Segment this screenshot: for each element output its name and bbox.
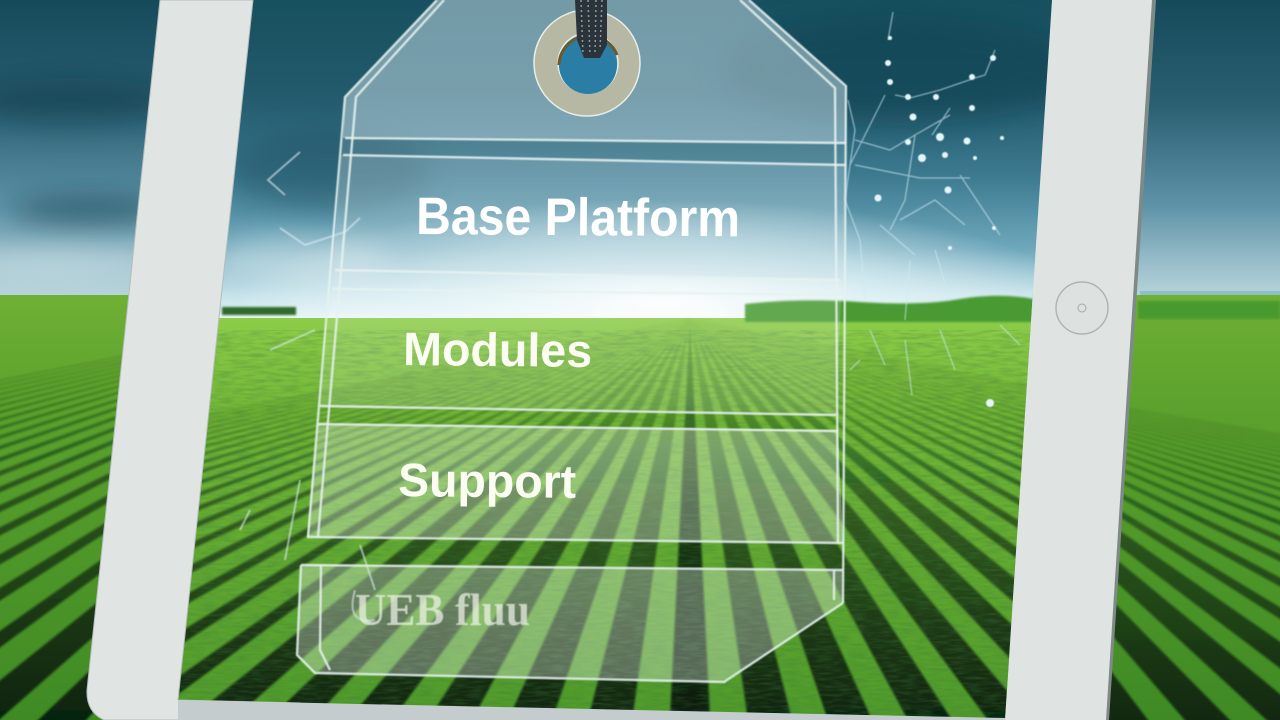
digital network sparkle right xyxy=(845,12,1020,407)
tag support band xyxy=(307,424,843,543)
tag gap band xyxy=(341,138,846,165)
label: Base Platform: Base Platform xyxy=(416,186,740,248)
tag bottom pocket xyxy=(297,565,843,682)
frame: bottom bezel xyxy=(178,700,1005,720)
label: Modules: Modules xyxy=(403,323,592,377)
frame: right edge shadow xyxy=(1106,0,1156,720)
glass tag xyxy=(297,0,846,682)
home button xyxy=(1056,282,1108,334)
frame: left bezel xyxy=(87,0,300,720)
label: garbled bottom text: UEB fluu xyxy=(355,584,530,635)
frame: right bezel xyxy=(1005,0,1155,720)
tag top section xyxy=(343,0,846,143)
eyelet xyxy=(534,10,640,116)
label: Support: Support xyxy=(398,454,576,508)
tablet screen: sky and crop field xyxy=(178,30,1048,718)
tag outlines xyxy=(297,0,846,682)
cord xyxy=(575,0,607,58)
tag modules band xyxy=(320,270,842,415)
tree line xyxy=(222,296,1040,322)
tag base platform band xyxy=(333,155,846,280)
digital squiggles left xyxy=(240,152,375,621)
